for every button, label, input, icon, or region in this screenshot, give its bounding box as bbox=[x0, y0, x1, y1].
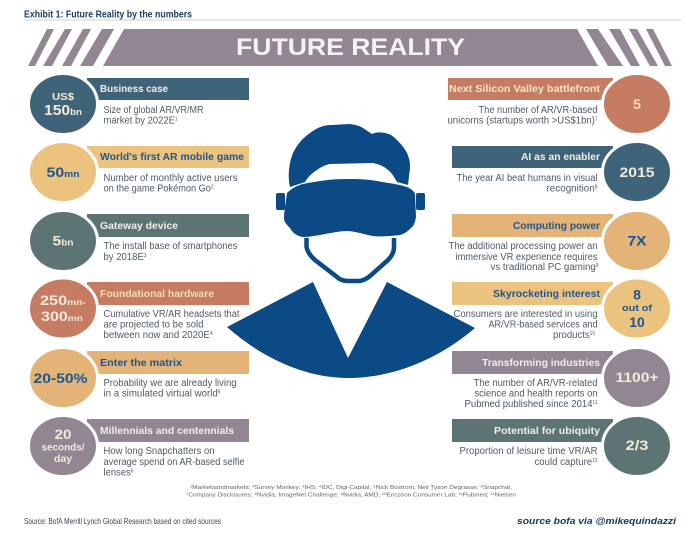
right item 5: transforming industries: Pubmed published since 2014 bbox=[464, 399, 598, 410]
right item 4: skyrocketing interest: products bbox=[553, 330, 591, 341]
right item 3: computing power: 7X bbox=[628, 232, 647, 248]
right item 1: Silicon Valley battlefront: unicorns (startups worth >US$1bn) bbox=[447, 116, 602, 126]
left item 6: millennials and centennials: 20 bbox=[54, 427, 72, 442]
right item 3: computing power: vs traditional PC gaming bbox=[490, 262, 599, 273]
right item 3: computing power: The additional processing power an bbox=[448, 241, 598, 252]
left item 6: millennials and centennials: day bbox=[54, 454, 72, 465]
left item 6: millennials and centennials: lenses bbox=[104, 468, 132, 478]
left item 4: foundational hardware: Cumulative VR/AR headsets that bbox=[104, 309, 240, 320]
footnotes: ⁷Company Disclosures; ⁸Nvidia, ImageNet Challenge; ⁹Nvidia, AMD; ¹⁰Ericsson Consumer Lab; ¹¹Pubmed; ¹²Nielsen bbox=[186, 492, 516, 498]
left item 6: millennials and centennials: How long Snapchatters on bbox=[104, 446, 214, 457]
right item 4: skyrocketing interest: out of bbox=[622, 303, 653, 314]
right item 1: Silicon Valley battlefront: The number of AR/VR-based bbox=[478, 105, 598, 116]
right item 6: potential for ubiquity: could capture bbox=[534, 457, 595, 468]
left item 3: gateway device: 3 bbox=[144, 253, 147, 259]
left item 1: business case bbox=[28, 74, 249, 134]
right item 6: potential for ubiquity: 2/3 bbox=[626, 437, 649, 453]
right item 4: skyrocketing interest: 10 bbox=[590, 331, 595, 337]
right item 6: potential for ubiquity bbox=[452, 416, 672, 476]
left item 5: enter the matrix: 20-50% bbox=[34, 370, 88, 386]
central figure: person wearing VR headset bbox=[227, 124, 475, 378]
left item 1: business case: Size of global AR/VR/MR bbox=[104, 105, 204, 116]
right item 2: AI as an enabler: 8 bbox=[595, 184, 598, 190]
title banner bbox=[28, 29, 672, 66]
left item 4: foundational hardware: Foundational hardware bbox=[100, 288, 214, 300]
right item 3: computing power bbox=[448, 210, 672, 273]
right item 2: AI as an enabler: AI as an enabler bbox=[521, 151, 600, 163]
left item 5: enter the matrix bbox=[28, 348, 249, 408]
left item 5: enter the matrix: 5 bbox=[218, 390, 221, 396]
right item 4: skyrocketing interest: AR/VR-based services and bbox=[488, 320, 598, 330]
left item 4: foundational hardware: 250 mn- bbox=[40, 293, 86, 308]
left item 5: enter the matrix: in a simulated virtual world bbox=[104, 388, 221, 400]
title banner: FUTURE REALITY bbox=[236, 34, 465, 61]
left item 6: millennials and centennials: seconds/ bbox=[42, 442, 85, 454]
left item 2: first AR mobile game bbox=[28, 142, 249, 202]
left item 2: first AR mobile game: on the game Pokémon Go bbox=[104, 184, 220, 194]
left item 4: foundational hardware bbox=[28, 278, 249, 341]
attribution: source bofa via @mikequindazzi bbox=[517, 516, 676, 527]
right item 6: potential for ubiquity: Potential for ubiquity bbox=[494, 425, 600, 437]
left item 2: first AR mobile game: World's first AR mobile game bbox=[100, 151, 244, 163]
right item 3: computing power: 9 bbox=[596, 263, 599, 269]
right item 6: potential for ubiquity: 12 bbox=[592, 458, 598, 464]
left item 2: first AR mobile game: Number of monthly active users bbox=[104, 173, 238, 184]
right item 6: potential for ubiquity: Proportion of leisure time VR/AR bbox=[460, 446, 598, 457]
right item 5: transforming industries: The number of AR/VR-related bbox=[474, 378, 598, 389]
exhibit heading: Exhibit 1: Future Reality by the numbers bbox=[24, 10, 192, 20]
left item 3: gateway device bbox=[28, 210, 249, 272]
left item 3: gateway device: The install base of smartphones bbox=[104, 241, 238, 252]
right item 5: transforming industries: science and health reports on bbox=[474, 388, 598, 400]
left item 3: gateway device: Gateway device bbox=[100, 220, 178, 232]
left item 4: foundational hardware: between now and 2020E bbox=[104, 330, 214, 341]
right item 5: transforming industries bbox=[452, 348, 672, 410]
left item 1: business case: US$ bbox=[52, 91, 74, 103]
left item 6: millennials and centennials bbox=[28, 416, 249, 478]
left item 5: enter the matrix: Probability we are already living bbox=[104, 378, 236, 389]
right item 2: AI as an enabler bbox=[452, 142, 672, 202]
source note: Source: BofA Merrill Lynch Global Research based on cited sources bbox=[24, 516, 221, 526]
footnotes bbox=[186, 484, 516, 498]
right item 4: skyrocketing interest: Consumers are interested in using bbox=[454, 309, 598, 320]
left item 1: business case: 1 bbox=[175, 116, 178, 122]
left item 5: enter the matrix: Enter the matrix bbox=[100, 357, 182, 369]
right item 4: skyrocketing interest: 8 bbox=[633, 286, 641, 302]
right item 4: skyrocketing interest: 10 bbox=[629, 314, 645, 330]
right item 5: transforming industries: Transforming industries bbox=[482, 357, 600, 369]
right item 3: computing power: Computing power bbox=[513, 220, 600, 232]
right item 3: computing power: immersive VR experience requires bbox=[456, 252, 598, 263]
left item 1: business case: market by 2022E bbox=[104, 116, 179, 126]
right item 2: AI as an enabler: 2015 bbox=[620, 164, 655, 180]
footnotes: ¹Marketsandmarkets; ²Survey Monkey; ³IHS; ⁴IDC, Digi-Capital; ⁵Nick Bostrom, Neil Tyson Degrasse; ⁶Snapchat, bbox=[190, 484, 513, 491]
right item 1: Silicon Valley battlefront bbox=[447, 74, 672, 134]
left item 6: millennials and centennials: 6 bbox=[131, 468, 134, 474]
right item 4: skyrocketing interest bbox=[452, 278, 672, 341]
left item 6: millennials and centennials: average spend on AR-based selfie bbox=[104, 457, 245, 468]
left item 4: foundational hardware: are projected to be sold bbox=[104, 320, 204, 330]
right item 1: Silicon Valley battlefront: 5 bbox=[633, 96, 641, 112]
left item 3: gateway device: by 2018E bbox=[104, 252, 146, 263]
right item 1: Silicon Valley battlefront: Next Silicon Valley battlefront bbox=[449, 83, 601, 95]
left item 1: business case: 150bn bbox=[44, 103, 82, 119]
left item 3: gateway device: 5bn bbox=[52, 232, 74, 248]
left item 2: first AR mobile game: 50mn bbox=[46, 164, 80, 180]
right item 2: AI as an enabler: The year AI beat humans in visual bbox=[456, 173, 598, 184]
left item 1: business case: Business case bbox=[100, 83, 168, 95]
left item 4: foundational hardware: 4 bbox=[210, 331, 213, 337]
left item 2: first AR mobile game: 2 bbox=[211, 184, 214, 190]
right item 1: Silicon Valley battlefront: 7 bbox=[595, 116, 598, 122]
left item 4: foundational hardware: 300 mn bbox=[41, 309, 83, 324]
right item 5: transforming industries: 1100+ bbox=[616, 370, 659, 385]
right item 5: transforming industries: 11 bbox=[593, 400, 598, 406]
right item 4: skyrocketing interest: Skyrocketing interest bbox=[493, 288, 600, 300]
right item 2: AI as an enabler: recognition bbox=[546, 184, 595, 194]
left item 6: millennials and centennials: Millennials and centennials bbox=[100, 425, 234, 437]
